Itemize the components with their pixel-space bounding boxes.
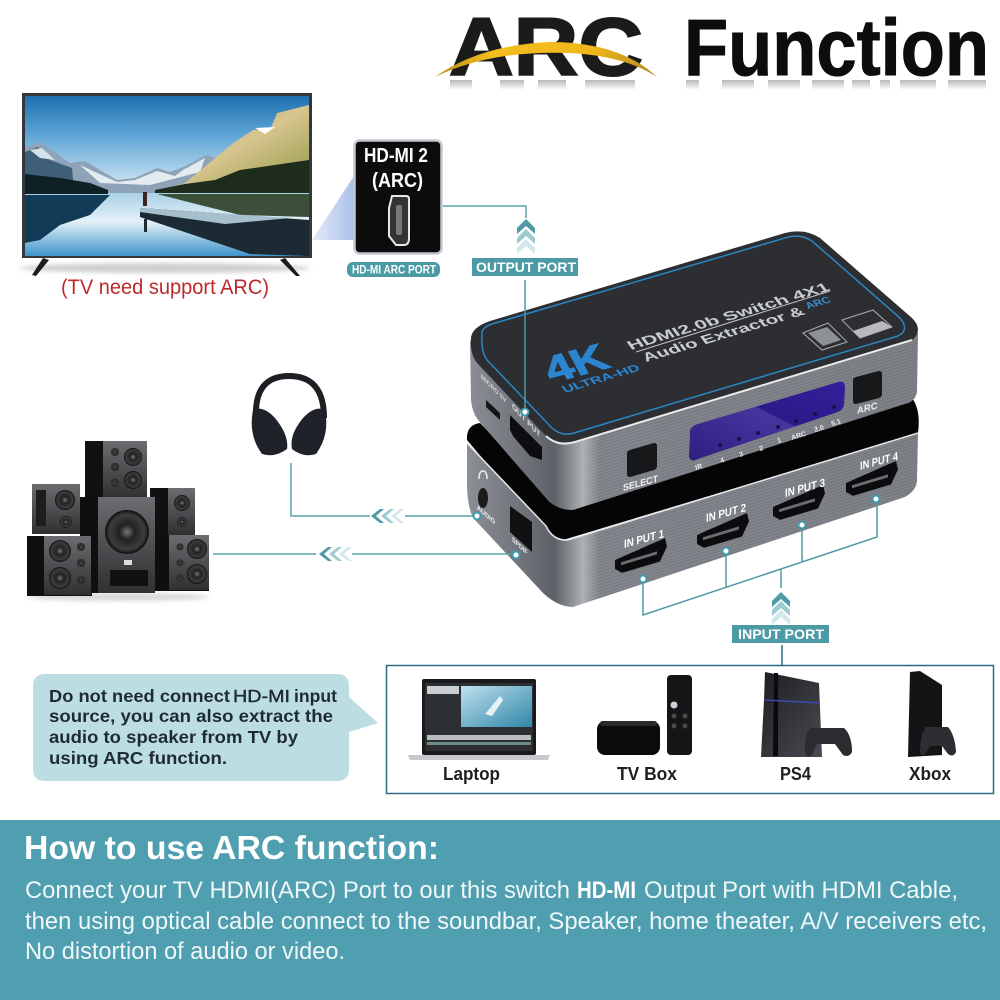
- spdif port: [510, 506, 532, 558]
- display labels: 1: [777, 437, 782, 445]
- callout bubble: [33, 674, 378, 781]
- product name: HDMI2.0b Switch 4X1: [624, 281, 833, 353]
- connector line: tv port to output: [443, 206, 526, 218]
- caption: TV need support ARC: (TV need support ARC): [61, 276, 269, 299]
- bottom left speaker: [27, 536, 92, 596]
- hdmi input 4: [846, 460, 898, 498]
- divider: [636, 291, 830, 352]
- body side: [470, 333, 918, 510]
- panel: input sources: [386, 666, 994, 794]
- audio badge: [842, 310, 892, 338]
- callout text: audio to speaker from TV by: [49, 727, 298, 747]
- callout: [33, 674, 378, 781]
- spdif port: SPDIF: [512, 535, 528, 558]
- display labels: 4: [720, 457, 725, 465]
- device: bottom unit: [467, 398, 919, 607]
- port heading: HD-MI 2: [364, 145, 428, 167]
- label: INPUT PORT: INPUT PORT: [738, 626, 824, 642]
- ARC logo: ARC: [449, 2, 643, 93]
- display labels: 3: [739, 451, 744, 459]
- instructions: [25, 877, 987, 965]
- connector line: input port to sources: [781, 645, 783, 665]
- dot: output: [522, 408, 528, 416]
- panel: how to use: [0, 820, 1000, 1000]
- port heading ARC: (ARC): [372, 170, 423, 192]
- connector line: speakers to spdif: [213, 553, 512, 555]
- connector lines: inputs: [640, 496, 880, 615]
- port labels: IN PUT 3: [785, 476, 825, 500]
- display labels: 2.0: [814, 424, 825, 434]
- connector line: output port: [522, 280, 528, 416]
- top highlight edge: [546, 340, 912, 444]
- ARC mark: ARC: [803, 295, 834, 311]
- hdmi output port: [510, 415, 542, 460]
- band: [0, 820, 1000, 1000]
- callout text: HD-MI: [233, 686, 290, 706]
- icon: headphones: [252, 376, 326, 455]
- label: OUTPUT PORT: OUTPUT PORT: [476, 259, 576, 275]
- tv frame: [22, 93, 312, 258]
- icon: ps4 console: [761, 672, 822, 757]
- icon: tv box: [597, 721, 660, 755]
- callout text: Do not need connect: [49, 686, 230, 706]
- select button: [627, 443, 657, 477]
- icon: ps4 controller: [805, 728, 852, 756]
- display labels: IR: [695, 463, 703, 472]
- bottom right speaker: [155, 535, 209, 591]
- hdmi input 3: [773, 484, 825, 522]
- speaker shadow: [26, 593, 210, 601]
- 4K logo: [536, 336, 643, 395]
- display labels: 2: [759, 445, 764, 453]
- icon: xbox controller: [920, 727, 956, 756]
- audio jack: AUDIO: [477, 502, 495, 527]
- left mid speaker: [32, 484, 80, 534]
- tv stand: [32, 258, 300, 276]
- instructions: HD-MI: [577, 877, 636, 904]
- callout text: using ARC function.: [49, 748, 227, 768]
- label: HD-MI ARC PORT: HD-MI ARC PORT: [352, 264, 436, 276]
- brushed metal: [590, 333, 918, 505]
- tv screen picture: [25, 96, 309, 256]
- brushed metal: [590, 433, 918, 602]
- port labels: IN PUT 1: [624, 527, 664, 551]
- port labels: [624, 450, 898, 551]
- title reflection: [450, 80, 986, 90]
- icon: speaker system: [26, 441, 210, 601]
- hdmi port closeup: [354, 140, 442, 254]
- 4K logo: ULTRA-HD: [559, 362, 643, 395]
- blue outline: [482, 236, 905, 434]
- instructions: No distortion of audio or video.: [25, 938, 345, 965]
- panel frame: [386, 666, 994, 794]
- port panel: [354, 140, 442, 254]
- dot: audio: [474, 512, 480, 520]
- black top face: [467, 398, 919, 540]
- arrow: audio chevrons: [371, 509, 404, 523]
- hdmi input 2: [697, 512, 749, 550]
- label: PS4: PS4: [780, 764, 811, 784]
- top speaker: [85, 441, 147, 499]
- heading: How to use ARC function:: [24, 829, 439, 866]
- display labels: 5.1: [831, 418, 842, 428]
- port labels: IN PUT 4: [860, 450, 898, 473]
- label: Xbox: Xbox: [909, 764, 951, 784]
- micro usb port: [486, 400, 500, 420]
- micro usb label: MICRO 5V: [481, 373, 506, 405]
- connector line: headphones to audio: [291, 463, 473, 516]
- zoom highlight from tv to port: [312, 176, 354, 240]
- subwoofer: [80, 497, 155, 593]
- 4K badge: [803, 323, 847, 350]
- hdmi input 1: [615, 537, 667, 575]
- audio jack: [477, 471, 495, 527]
- display labels: ARC: [791, 431, 807, 442]
- icon: xbox console: [908, 671, 942, 757]
- device: top unit: [470, 231, 918, 510]
- title: ARC Function: [435, 2, 989, 93]
- instructions: Connect your TV HDMI(ARC) Port to our this switch: [25, 877, 570, 904]
- icon: remote: [667, 675, 692, 755]
- port labels: IN PUT 2: [706, 501, 746, 525]
- tv shadow: [20, 263, 310, 273]
- arrow: output up chevrons: [517, 219, 535, 254]
- leds: [718, 405, 836, 447]
- arrow: spdif chevrons: [319, 547, 352, 561]
- arc button: [853, 371, 882, 404]
- highlight edge: [467, 433, 918, 540]
- display labels: [695, 418, 842, 472]
- 4K logo: 4K: [536, 336, 616, 391]
- top face: [471, 231, 918, 444]
- status display: [689, 382, 845, 460]
- body side: [467, 433, 918, 607]
- product subtitle: Audio Extractor &: [639, 305, 809, 365]
- select label: SELECT: [623, 474, 658, 494]
- output label: OUT PUT: [512, 401, 541, 440]
- callout text: input: [294, 686, 337, 706]
- right mid speaker: [150, 488, 195, 535]
- instructions: then using optical cable connect to the soundbar, Speaker, home theater, A/V receivers etc,: [25, 908, 987, 935]
- arrow: input up chevrons: [772, 592, 790, 625]
- callout text: [49, 686, 337, 768]
- icon: laptop: [408, 679, 550, 760]
- arc label: ARC: [857, 401, 878, 417]
- callout text: source, you can also extract the: [49, 706, 333, 726]
- icon: hdmi socket: [389, 196, 409, 245]
- instructions: Output Port with HDMI Cable,: [644, 877, 958, 904]
- television: [20, 93, 312, 276]
- dot: spdif: [512, 552, 520, 558]
- label: TV Box: TV Box: [617, 764, 677, 784]
- label: Laptop: Laptop: [443, 764, 500, 784]
